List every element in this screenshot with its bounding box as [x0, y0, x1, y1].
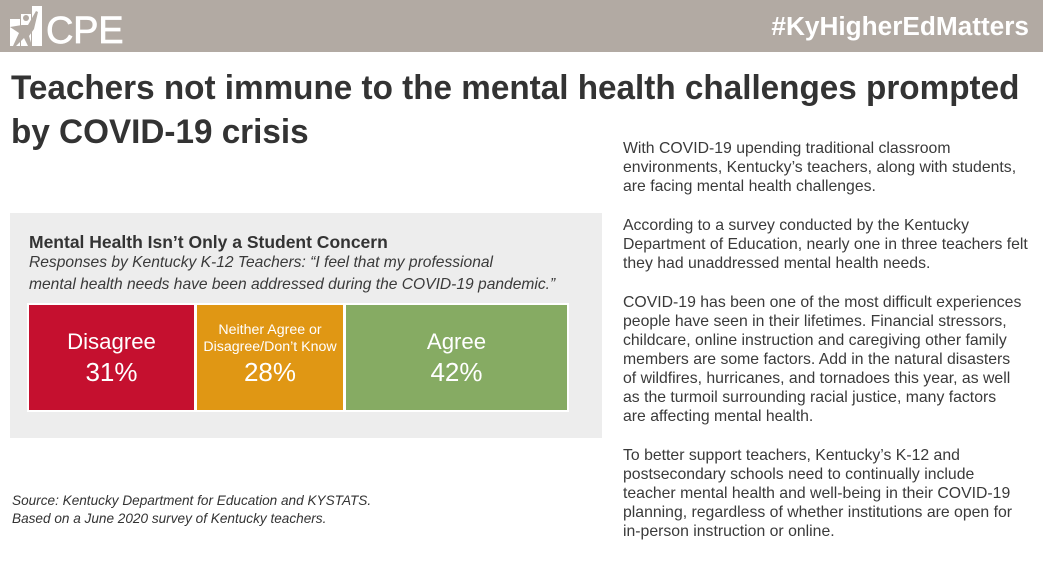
- paragraph 4: To better support teachers, Kentucky’s K-12 and: [623, 447, 960, 464]
- paragraph 2: Department of Education, nearly one in three teachers felt: [623, 236, 1028, 253]
- chart subtitle: Responses by Kentucky K-12 Teachers: “I feel that my professional: [29, 254, 493, 271]
- paragraph 3: people have seen in their lifetimes. Financial stressors,: [623, 313, 1007, 330]
- paragraph 4: teacher mental health and well-being in their COVID-19: [623, 485, 1010, 502]
- chart heading: Mental Health Isn’t Only a Student Concern: [29, 232, 388, 252]
- paragraph 4: in-person instruction or online.: [623, 523, 835, 540]
- stacked bar: [27, 303, 569, 412]
- source note: [12, 493, 371, 526]
- segment: disagree: [29, 305, 194, 410]
- neither label: [203, 322, 337, 355]
- neither label: Neither Agree or: [218, 322, 322, 338]
- paragraph 1: are facing mental health challenges.: [623, 178, 876, 195]
- neither value: 28%: [244, 357, 296, 387]
- paragraph 3: members are some factors. Add in the natural disasters: [623, 351, 1010, 368]
- paragraph 2: they had unaddressed mental health needs.: [623, 255, 930, 272]
- paragraph 2: [623, 217, 1028, 272]
- paragraph 3: of wildfires, hurricanes, and tornadoes this year, as well: [623, 370, 1010, 387]
- paragraph 3: are affecting mental health.: [623, 408, 813, 425]
- chart subtitle: mental health needs have been addressed during the COVID-19 pandemic.”: [29, 276, 555, 292]
- icon: CPE logo mark: [10, 6, 42, 46]
- title: [11, 69, 1019, 150]
- paragraph 1: With COVID-19 upending traditional classroom: [623, 140, 950, 157]
- source note: Source: Kentucky Department for Education and KYSTATS.: [12, 493, 371, 508]
- logo text: CPE: [46, 10, 123, 52]
- paragraph 4: [623, 447, 1012, 540]
- paragraph 3: childcare, online instruction and caregiving other family: [623, 332, 1007, 349]
- title: by COVID-19 crisis: [11, 112, 309, 150]
- agree label: Agree: [427, 329, 486, 354]
- agree value: 42%: [430, 357, 483, 387]
- paragraph 2: According to a survey conducted by the Kentucky: [623, 217, 969, 234]
- disagree label: Disagree: [67, 329, 156, 354]
- source note: Based on a June 2020 survey of Kentucky teachers.: [12, 511, 326, 526]
- segment: neither: [197, 305, 343, 410]
- paragraph 3: as the turmoil surrounding racial justice, many factors: [623, 389, 996, 406]
- paragraph 3: COVID-19 has been one of the most difficult experiences: [623, 294, 1021, 311]
- header band: [0, 0, 1043, 52]
- chart subtitle: [29, 254, 556, 292]
- paragraph 3: [623, 294, 1021, 425]
- neither label: Disagree/Don’t Know: [203, 339, 337, 355]
- panel: survey chart: [10, 213, 602, 438]
- hashtag: #KyHigherEdMatters: [771, 11, 1029, 41]
- paragraph 4: planning, regardless of whether institutions are open for: [623, 504, 1012, 521]
- paragraph 1: [623, 140, 1016, 195]
- segment: agree: [346, 305, 567, 410]
- title: Teachers not immune to the mental health challenges prompted: [11, 69, 1019, 107]
- disagree value: 31%: [85, 357, 138, 387]
- paragraph 1: environments, Kentucky’s teachers, along with students,: [623, 159, 1016, 176]
- paragraph 4: postsecondary schools need to continually include: [623, 466, 974, 483]
